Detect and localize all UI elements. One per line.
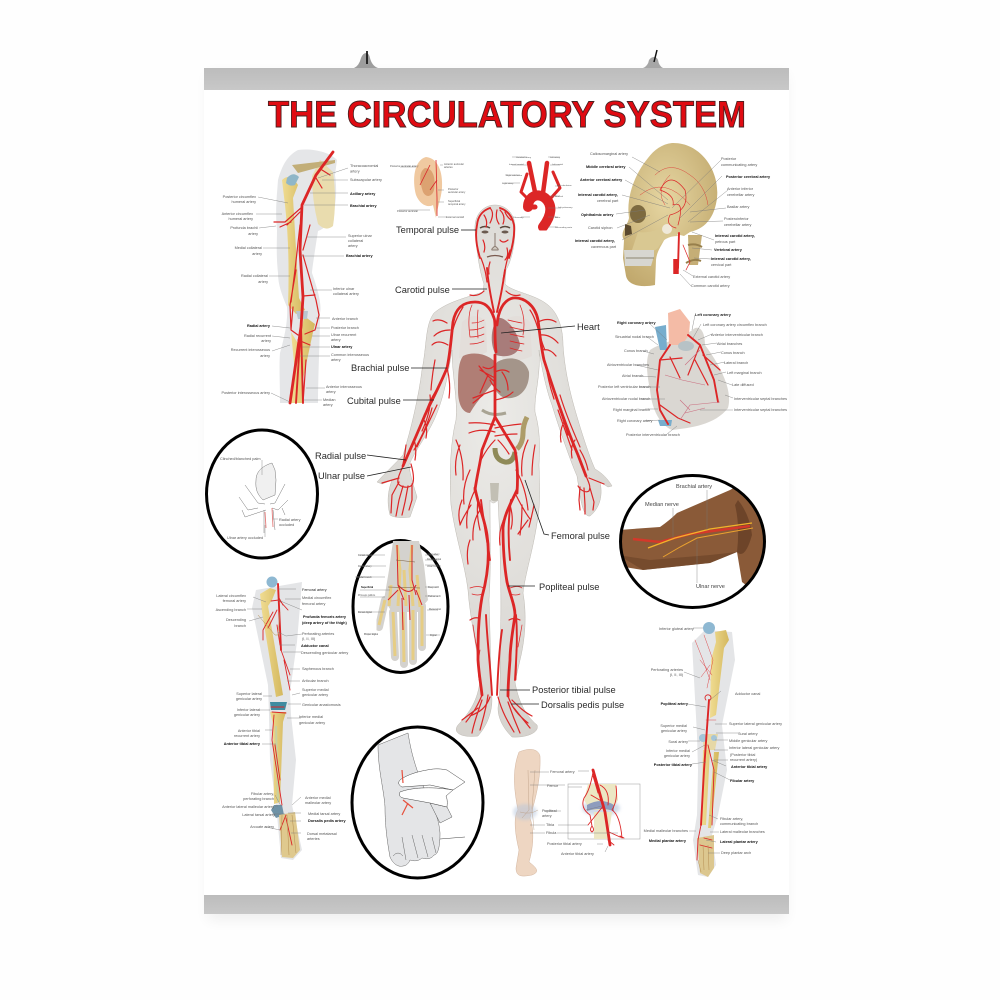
heart labels right [695, 313, 787, 412]
arm labels left: Radial collateral [241, 274, 268, 278]
posterior leg labels right: Anterior tibial artery [731, 765, 768, 769]
leg labels right: Saphenous branch [302, 667, 334, 671]
arm artwork [274, 149, 337, 403]
skull labels right: Posterior cerebral artery [726, 175, 771, 179]
knee labels: artery [542, 814, 552, 818]
skull labels left [575, 152, 628, 249]
leg labels left: branch [234, 624, 246, 628]
skull labels right: Common carotid artery [691, 284, 730, 288]
skull labels left: cavernous part [591, 245, 617, 249]
hand artwork [379, 541, 428, 664]
label: brachial pulse [351, 363, 447, 373]
leg labels right: Descending genicular artery [301, 651, 348, 655]
leg labels right: Inferior medial [299, 715, 323, 719]
hand labels: Proper digital [364, 633, 379, 636]
hand labels: Ulnar artery [427, 553, 440, 556]
arm labels left: artery [261, 339, 271, 343]
central body figure [377, 205, 612, 737]
arm labels right: artery [348, 244, 358, 248]
label: cubital pulse [347, 396, 434, 406]
knee labels: Anterior tibial artery [561, 852, 594, 856]
skull labels right: Vertebral artery [714, 248, 743, 252]
ear leaders [399, 165, 446, 217]
arm labels left [221, 195, 272, 395]
leg labels right: (I, II, III) [302, 637, 316, 641]
label: popliteal pulse: Popliteal pulse [539, 582, 599, 592]
heart labels left: Atrioventricular nodal branch [602, 397, 650, 401]
leg labels right: Perforating arteries [302, 632, 334, 636]
leg labels left: Lateral tarsal artery [242, 813, 275, 817]
arm labels left: Posterior interosseous artery [221, 391, 270, 395]
arm labels right: Superior ulnar [348, 234, 373, 238]
liver [458, 354, 500, 413]
panel: aortic arch [502, 156, 573, 229]
skull labels right: cervical part [711, 263, 732, 267]
heart leaders [636, 315, 733, 434]
hand labels: Palmar arch [428, 595, 442, 598]
posterior leg labels left [644, 627, 694, 843]
intestines [482, 410, 527, 502]
ear labels: Anterior auricular [444, 162, 464, 166]
leg artwork [252, 576, 302, 860]
knee labels: Fibula [546, 831, 557, 835]
leg labels right: Articular branch [302, 679, 329, 683]
arteries: legs [459, 488, 534, 733]
arm labels right: Posterior branch [331, 326, 359, 330]
circle outline [206, 430, 318, 558]
arm labels right: collateral artery [333, 292, 359, 296]
leg labels right: genicular artery [302, 693, 328, 697]
leg labels left: Ascending branch [216, 608, 246, 612]
heart labels left: Right coronary artery [617, 321, 657, 325]
photo labels: Ulnar nerve [696, 584, 725, 590]
circle outline [352, 727, 483, 878]
posterior leg labels right: Superior lateral genicular artery [729, 722, 782, 726]
arm labels right: artery [323, 403, 333, 407]
posterior leg labels right: Middle genicular artery [729, 739, 768, 743]
ear labels: Posterior auricular artery [390, 164, 419, 168]
leg labels right: femoral artery [302, 602, 326, 606]
leg labels right: Dorsal metatarsal [307, 832, 337, 836]
hand labels: Radial artery [358, 565, 372, 568]
heart labels right: Late diffused [732, 383, 754, 387]
arm skin [622, 488, 763, 584]
knee leaders [530, 771, 618, 852]
arm labels right: artery [331, 338, 341, 342]
posterior leg labels right: (Posterior tibial [730, 753, 755, 757]
arm labels left: Medial collateral [235, 246, 262, 250]
leg labels left: recurrent artery [234, 734, 260, 738]
skull labels right: Posteroinferior [724, 217, 749, 221]
photo labels: Median nerve [645, 502, 679, 508]
skull labels right: cerebellar artery [727, 193, 755, 197]
ear labels [390, 162, 466, 219]
posterior leg labels right: Sural artery [738, 732, 758, 736]
arm labels left: artery [258, 280, 268, 284]
thumb circle labels: Clinched/blanched palm [220, 457, 261, 461]
posterior leg labels right: Fibular artery, [720, 817, 743, 821]
arm labels right: collateral [348, 239, 363, 243]
skull labels left: Ophthalmic artery [581, 213, 614, 217]
hand labels: Ulnar branch [427, 565, 441, 568]
hook: right [643, 50, 663, 68]
leg labels right: arteries [307, 837, 320, 841]
skull labels left: Internal carotid artery, [575, 239, 615, 243]
leg labels right: Adductor canal [301, 644, 329, 648]
poster shadow [208, 74, 786, 920]
foot drawing [378, 733, 465, 866]
lungs [459, 316, 532, 361]
leg labels left: Arcuate artery [250, 825, 274, 829]
label: heart: Heart [577, 322, 600, 332]
arm labels left: artery [260, 354, 270, 358]
hand labels: Superficial [361, 586, 374, 589]
circle outline [353, 540, 448, 672]
skull labels left: cerebral part [597, 199, 619, 203]
thumb circle labels: Radial artery [279, 518, 301, 522]
aortic arch labels: Left artery [550, 156, 561, 159]
arm labels right: Median [323, 398, 335, 402]
posterior leg labels left: Medial plantar artery [649, 839, 687, 843]
arm labels right: artery [331, 358, 341, 362]
leg labels left: Anterior tibial artery [224, 742, 261, 746]
leg labels right: Superior medial [302, 688, 329, 692]
arm labels right: Brachial artery [346, 254, 373, 258]
posterior leg labels left: Popliteal artery [661, 702, 689, 706]
aortic arch labels [502, 156, 573, 229]
bottom hanger bar [204, 895, 789, 914]
skull labels left: Anterior cerebral artery [580, 178, 623, 182]
pulse labels [315, 225, 624, 710]
leg labels left: Anterior tibial [238, 729, 260, 733]
leg labels right [299, 588, 348, 841]
label: radial pulse [315, 451, 406, 461]
ear labels: Posterior auricular [397, 209, 418, 213]
knee detail box [568, 770, 640, 845]
posterior leg labels left: genicular artery [664, 754, 690, 758]
aortic arch artwork [521, 163, 560, 227]
arm labels right: Common interosseous [331, 353, 369, 357]
knee labels: Popliteal [542, 809, 557, 813]
arm labels left: humeral artery [232, 200, 256, 204]
leg labels left: Lateral circumflex [216, 594, 246, 598]
skull labels left: Callosomarginal artery [590, 152, 628, 156]
arm labels right: Anterior interosseous [326, 385, 362, 389]
heart labels left: Conus branch [624, 349, 648, 353]
leg labels right: Medial tarsal artery [308, 812, 340, 816]
heart labels left [598, 321, 680, 437]
skull labels right: Internal carotid artery, [715, 234, 755, 238]
ear labels: auricular artery [448, 190, 466, 194]
heart labels right: Anterior interventricular branch [711, 333, 763, 337]
arm label leaders [256, 168, 348, 402]
body silhouette [377, 205, 612, 737]
heart labels right: Lateral branch [724, 361, 748, 365]
hand labels: Digital [430, 634, 437, 637]
arm labels left: Profunda brachii [230, 226, 258, 230]
heart labels right: Left coronary artery circumflex branch [703, 323, 767, 327]
panel: ear arteries [390, 157, 466, 219]
skull leaders [616, 157, 728, 286]
skull labels right: Internal carotid artery, [711, 257, 751, 261]
heart labels right: Left coronary artery [695, 313, 732, 317]
aortic arch labels: Pulmonary [513, 216, 524, 219]
panel: circle, arm photo [618, 476, 770, 608]
skull labels right: Posterior [721, 157, 737, 161]
heart labels right: Conus branch [721, 351, 745, 355]
hook: left [354, 51, 378, 68]
posterior leg labels left: Superior medial [660, 724, 687, 728]
posterior leg leaders [684, 628, 738, 853]
label: brachial pulse: Brachial pulse [351, 363, 409, 373]
aortic arch labels: Right subclavian [506, 174, 523, 177]
arm labels right: Axillary artery [350, 192, 376, 196]
heart labels left: Posterior interventricular branch [626, 433, 680, 437]
hand labels [355, 553, 442, 637]
leg labels right: Dorsalis pedis artery [308, 819, 346, 823]
knee labels [542, 770, 594, 856]
skull labels left: Middle cerebral artery [586, 165, 626, 169]
heart labels right: Atrial branches [717, 342, 742, 346]
title: THE CIRCULATORY SYSTEM [268, 94, 746, 135]
arm labels right: Inferior ulnar [333, 287, 355, 291]
heart labels right: Interventricular septal branches [734, 408, 787, 412]
panel: heart arteries [598, 309, 787, 437]
arm labels right: Thoracoacromial [350, 164, 378, 168]
thumb circle labels [220, 457, 301, 540]
aortic arch labels: Aorta [555, 216, 561, 219]
aortic arch labels: Internal carotid [509, 163, 524, 166]
leg labels right: genicular artery [299, 721, 325, 725]
posterior leg labels right [720, 692, 782, 855]
ear labels: Superficial [448, 199, 461, 203]
hand labels: Princeps pollicis [358, 594, 376, 597]
posterior leg labels left: (I, II, III) [670, 673, 684, 677]
arm labels left: humeral artery [229, 217, 253, 221]
aortic arch leaders [504, 157, 561, 227]
ear labels: temporal artery [448, 202, 466, 206]
label: ulnar pulse: Ulnar pulse [318, 471, 365, 481]
leg labels right: Profunda femoris artery [303, 615, 347, 619]
circle outline [620, 476, 764, 608]
ear artwork [414, 157, 442, 218]
label: posterior tibial pulse: Posterior tibial pulse [532, 685, 616, 695]
skull labels right [691, 157, 771, 288]
panel: arm arteries [221, 149, 382, 407]
arm labels left: Anterior circumflex [222, 212, 253, 216]
heart labels right: Interventricular septal branches [734, 397, 787, 401]
heart labels left: Posterior left ventricular branch [598, 385, 651, 389]
arm labels left: artery [248, 232, 258, 236]
leg labels left: femoral artery [223, 599, 246, 603]
leg labels right: Anterior medial [305, 796, 331, 800]
panel: circle, thumb press test [206, 430, 318, 558]
leg labels right: Genicular anastomosis [302, 703, 341, 707]
aortic arch labels: Left carotid [552, 163, 564, 166]
thumb circle labels: occluded [279, 523, 294, 527]
arm labels right: Ulnar recurrent [331, 333, 357, 337]
leg labels right: malleolar artery [305, 801, 331, 805]
label: cubital pulse: Cubital pulse [347, 396, 401, 406]
panel: circle, hand arteries [353, 540, 448, 672]
label: carotid pulse: Carotid pulse [395, 285, 450, 295]
posterior leg labels right: Lateral plantar artery [720, 840, 759, 844]
aortic arch labels: Brachial [555, 195, 563, 198]
heart labels left: Sinuatrial nodal branch [615, 335, 654, 339]
arm labels left: Recurrent interosseous [231, 348, 270, 352]
posterior leg labels right: Adductor canal [735, 692, 760, 696]
photo labels: Brachial artery [676, 484, 712, 490]
label: heart [501, 322, 600, 333]
posterior leg labels right: Fibular artery [730, 779, 755, 783]
leg labels left: perforating branch [243, 797, 274, 801]
label: temporal pulse: Temporal pulse [396, 225, 459, 235]
posterior leg labels left: Sural artery [668, 740, 688, 744]
head shading [480, 226, 510, 257]
posterior leg labels left: genicular artery [661, 729, 687, 733]
leg labels right: (deep artery of the thigh) [302, 621, 347, 625]
hand labels: Dorsal digital [358, 611, 372, 614]
heart labels left: Atrioventricular branches [607, 363, 649, 367]
arm labels right: Anterior branch [332, 317, 358, 321]
arm labels left: Radial artery [247, 324, 271, 328]
posterior leg labels right: Inferior lateral genicular artery [729, 746, 780, 750]
heart artwork [647, 309, 729, 430]
posterior leg labels right: Lateral malleolar branches [720, 830, 765, 834]
leg labels left: Anterior lateral malleolar artery [222, 805, 274, 809]
arm labels right: Brachial artery [350, 204, 377, 208]
posterior leg labels left: Perforating arteries [651, 668, 683, 672]
ear labels: Posterior [448, 187, 459, 191]
top hanger bar [204, 68, 789, 90]
arteries: trunk and arms [382, 208, 604, 516]
posterior leg labels left: Medial malleolar branches [644, 829, 688, 833]
leg labels left: Fibular artery, [251, 792, 274, 796]
aortic arch labels: Left pulmonary [558, 206, 573, 209]
arm labels right: artery [326, 390, 336, 394]
skull artwork [622, 143, 717, 286]
skull labels right: communicating artery [721, 163, 757, 167]
label: femoral pulse [525, 480, 610, 541]
stomach and spleen [492, 358, 529, 398]
panel: knee inset [513, 749, 640, 876]
hand line drawing [239, 463, 288, 533]
panel: skull arteries [575, 143, 771, 288]
leg labels left: Inferior lateral [237, 708, 260, 712]
hand labels: Metacarpal [429, 608, 441, 611]
heart labels left: Right coronary artery [617, 419, 653, 423]
posterior leg labels left: Inferior medial [666, 749, 690, 753]
posterior leg labels left: Posterior tibial artery [654, 763, 693, 767]
label: dorsalis pedis pulse: Dorsalis pedis pulse [541, 700, 624, 710]
skull labels right: petrous part [715, 240, 736, 244]
label: radial pulse: Radial pulse [315, 451, 366, 461]
hand labels: Deep arch [428, 586, 440, 589]
label: popliteal pulse [508, 582, 599, 592]
ear labels: External carotid [446, 215, 465, 219]
posterior leg labels right: recurrent artery) [730, 758, 758, 762]
thumb circle labels: Ulnar artery occluded [227, 536, 263, 540]
posterior leg labels left: Inferior gluteal artery [659, 627, 694, 631]
knee labels: Femoral artery [550, 770, 575, 774]
hand labels: Dorsal carpal [358, 554, 373, 557]
aortic arch labels: Descending aorta [555, 226, 573, 229]
heart [492, 318, 520, 356]
panel: posterior leg arteries [644, 622, 782, 877]
leg labels right: Medial circumflex [302, 596, 331, 600]
arm labels right [323, 164, 382, 407]
arm labels left: Radial recurrent [244, 334, 272, 338]
leg labels left: Superior lateral [236, 692, 262, 696]
poster sheet [204, 85, 789, 900]
panel: femoral leg arteries [216, 576, 348, 860]
heart labels left: Right marginal branch [613, 408, 650, 412]
knee labels: Posterior tibial artery [547, 842, 582, 846]
panel: circle, foot pulse [352, 727, 483, 878]
arm labels right: Ulnar artery [331, 345, 353, 349]
skull labels right: cerebellar artery [724, 223, 752, 227]
heart labels right: Left marginal branch [727, 371, 762, 375]
heart labels left: Atrial branch [622, 374, 643, 378]
label: ulnar pulse [318, 467, 411, 481]
photo labels [645, 484, 725, 590]
knee labels: Femur [547, 784, 559, 788]
skull labels left: Carotid siphon [588, 226, 612, 230]
aortic arch labels: Right artery [502, 182, 514, 185]
arm labels left: artery [252, 252, 262, 256]
knee labels: Tibia [546, 823, 555, 827]
skull labels right: Basilar artery [727, 205, 749, 209]
hand labels: Dorsal carpal [427, 558, 442, 561]
posterior leg labels right: Deep plantar arch [721, 851, 751, 855]
skull labels left: Internal carotid artery, [578, 193, 618, 197]
leg labels left: genicular artery [236, 697, 262, 701]
leg labels left: Descending [226, 618, 246, 622]
hand labels: Radial branch [357, 576, 372, 579]
arm labels right: artery [350, 170, 360, 174]
leg labels left: genicular artery [234, 713, 260, 717]
ear labels: arteries [444, 165, 453, 169]
leg labels left [216, 594, 275, 829]
label: carotid pulse [395, 285, 487, 295]
leg back view [513, 749, 540, 876]
leg leaders [247, 589, 302, 833]
aortic arch labels: Left subclavian [557, 184, 572, 187]
posterior leg labels right: communicating branch [720, 822, 758, 826]
leg labels right: Femoral artery [302, 588, 327, 592]
leg artwork [692, 622, 735, 877]
aortic arch labels: Vertebral artery [516, 156, 532, 159]
arm labels right: Subscapular artery [350, 178, 382, 182]
skull labels right: Anterior inferior [727, 187, 754, 191]
skull labels right: External carotid artery [693, 275, 730, 279]
label: femoral pulse: Femoral pulse [551, 531, 610, 541]
arm labels left: Posterior circumflex [223, 195, 256, 199]
